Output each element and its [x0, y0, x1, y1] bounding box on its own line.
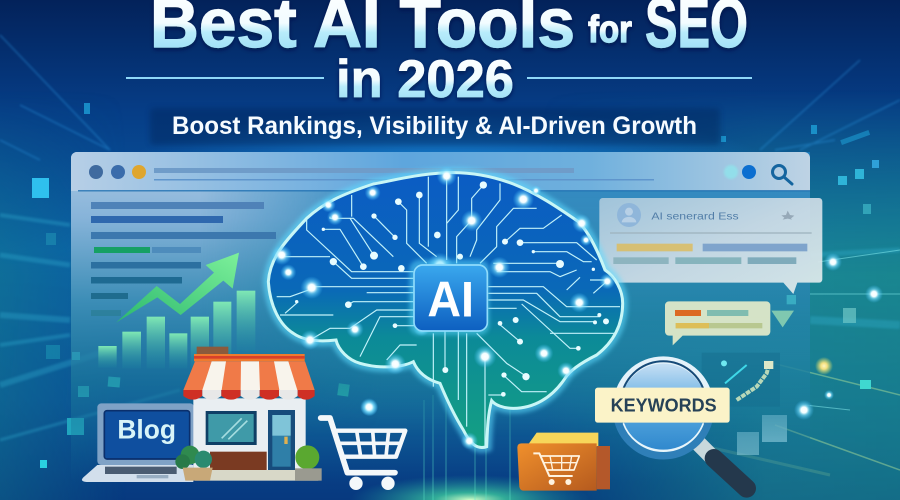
- mini line chart: [702, 353, 780, 407]
- card text lines: [613, 244, 807, 264]
- growth arrow: [116, 253, 239, 323]
- shopping cart: [321, 418, 405, 490]
- year heading: in 2026: [336, 50, 514, 109]
- brain: [268, 166, 623, 450]
- browser window panel: [71, 152, 810, 482]
- storefront: [175, 347, 322, 481]
- magnifying glass with keywords label: [595, 360, 747, 488]
- shop window: [206, 411, 257, 445]
- left plant: [175, 446, 213, 481]
- right plant: [295, 445, 322, 481]
- subtitle: Boost Rankings, Visibility & AI-Driven Growth: [172, 112, 697, 140]
- growth chart: [98, 253, 255, 368]
- page text lines: [91, 202, 276, 316]
- heading rule right: [527, 77, 752, 79]
- star icon: [781, 211, 794, 220]
- address bar: [78, 168, 810, 192]
- magnifier handle: [698, 443, 747, 488]
- window dots: [89, 165, 146, 179]
- magnifier lens: [617, 360, 710, 453]
- card heading: AI senerard Ess: [651, 211, 739, 222]
- circuit traces: [277, 177, 620, 447]
- keywords label: [595, 388, 730, 423]
- shopping box icon: [517, 433, 610, 491]
- circuit nodes: [295, 181, 609, 397]
- brain silhouette: [268, 173, 623, 448]
- AI chip: AI: [427, 272, 474, 328]
- sparkles: [360, 253, 883, 420]
- glowing nodes: [272, 166, 615, 450]
- brain glow: [268, 173, 623, 448]
- speech bubble: [665, 301, 794, 345]
- keywords label: KEYWORDS: [611, 395, 717, 416]
- AI content card: [599, 198, 822, 407]
- search icon: [772, 166, 792, 184]
- heading rule left: [126, 77, 324, 79]
- main title: for: [588, 9, 632, 51]
- subtitle band: [150, 108, 720, 145]
- title block: [126, 0, 752, 145]
- avatar icon: [617, 203, 641, 227]
- floating data squares: [32, 160, 879, 468]
- cart on box: [533, 453, 579, 485]
- shop door: [268, 410, 295, 470]
- laptop with Blog screen: Blog: [117, 415, 176, 445]
- AI chip: [409, 260, 489, 335]
- awning: [183, 354, 315, 400]
- bar chart: [98, 291, 255, 368]
- golden sparkle: [815, 357, 833, 375]
- laptop with Blog screen: [82, 403, 194, 482]
- browser top bar: [71, 152, 810, 191]
